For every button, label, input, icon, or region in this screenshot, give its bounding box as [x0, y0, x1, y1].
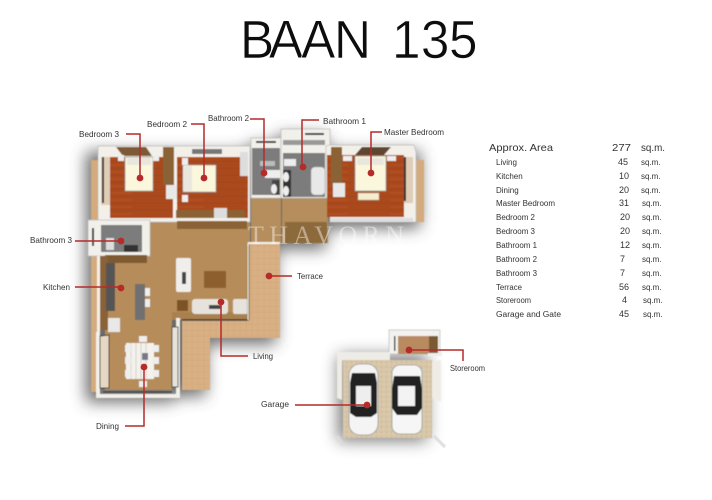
leader: master bedroom: [371, 132, 382, 173]
table rows: 4: [622, 295, 627, 305]
dining table: [125, 336, 159, 387]
closet: [331, 147, 342, 185]
bedroom 3 room: [101, 147, 173, 218]
room labels: Kitchen: [43, 282, 70, 292]
leader dots: [118, 164, 412, 408]
table rows: sq.m.: [642, 227, 662, 236]
table rows: sq.m.: [642, 283, 662, 292]
leader: kitchen: [75, 286, 121, 288]
storeroom: [389, 330, 440, 354]
floor plan: main house: [86, 129, 424, 402]
room labels: Bedroom 2: [147, 119, 187, 129]
kitchen: [98, 255, 150, 332]
area table: [489, 142, 665, 319]
table rows: 10: [619, 171, 629, 181]
drop shadow: [86, 135, 420, 402]
bathroom 1 room: [281, 129, 330, 198]
table rows: sq.m.: [642, 269, 662, 278]
bathroom 3 room: [88, 220, 150, 256]
table rows: 7: [620, 268, 625, 278]
table rows: Living: [496, 158, 517, 167]
leader: living: [221, 302, 248, 356]
table heading: 277: [612, 142, 631, 154]
table rows: 20: [620, 212, 630, 222]
table rows: Dining: [496, 186, 519, 195]
table rows: [496, 157, 663, 319]
table rows: Bedroom 3: [496, 227, 536, 236]
room labels: Bathroom 1: [323, 116, 366, 126]
leader lines: [75, 119, 463, 426]
window: [192, 149, 222, 154]
table rows: 45: [618, 157, 628, 167]
room labels: Bathroom 3: [30, 235, 72, 245]
table rows: 20: [619, 185, 629, 195]
title: BAAN: [240, 10, 371, 70]
room labels: [30, 113, 485, 431]
garage floor: [343, 360, 432, 438]
table rows: sq.m.: [641, 186, 661, 195]
table rows: Bedroom 2: [496, 213, 536, 222]
room labels: Bathroom 2: [208, 113, 249, 123]
room labels: Storeroom: [450, 363, 485, 373]
bed: [355, 156, 386, 191]
table rows: 20: [620, 226, 630, 236]
wardrobe top: [355, 147, 391, 155]
leader: bathroom 3: [75, 240, 121, 242]
room labels: Master Bedroom: [384, 127, 444, 137]
table rows: sq.m.: [643, 310, 663, 319]
table heading: sq.m.: [641, 142, 665, 154]
table rows: Kitchen: [496, 172, 523, 181]
closet between rooms: [163, 147, 174, 185]
room labels: Garage: [261, 399, 289, 409]
table rows: sq.m.: [642, 255, 662, 264]
room labels: Dining: [96, 421, 119, 431]
leader: terrace: [269, 275, 292, 277]
leader: storeroom: [409, 350, 463, 361]
table rows: 56: [619, 282, 629, 292]
leader: bedroom 3: [126, 134, 140, 178]
bed: [183, 165, 216, 192]
watermark: THAVORN: [248, 221, 404, 250]
bathroom 2 room: [251, 138, 281, 198]
table heading: Approx. Area: [489, 142, 553, 154]
table rows: Bathroom 2: [496, 255, 538, 264]
table rows: Storeroom: [496, 296, 531, 305]
table rows: 45: [619, 309, 629, 319]
table rows: sq.m.: [643, 296, 663, 305]
window: [101, 157, 110, 205]
master bedroom room: [326, 145, 416, 222]
title: [240, 10, 478, 70]
leader: garage: [295, 404, 367, 406]
table rows: sq.m.: [641, 172, 661, 181]
desk: [176, 210, 245, 218]
title: 135: [392, 10, 478, 70]
table rows: Terrace: [496, 283, 523, 292]
leader: bedroom 2: [191, 124, 204, 178]
living furniture: [176, 258, 248, 314]
leader: dining: [125, 367, 144, 426]
wardrobe top: [116, 147, 152, 156]
table rows: 31: [619, 198, 629, 208]
bedroom 2 room: [176, 149, 248, 218]
outer walls: bedroom wing: [98, 146, 250, 222]
right deck: [414, 160, 424, 222]
table heading: [489, 142, 665, 154]
table rows: sq.m.: [642, 213, 662, 222]
window: [404, 157, 413, 203]
table rows: sq.m.: [642, 199, 662, 208]
table rows: 7: [620, 254, 625, 264]
left deck: [91, 160, 99, 392]
dining walls and windows: [98, 320, 180, 396]
leader: bathroom 2: [250, 119, 264, 173]
table rows: Bathroom 1: [496, 241, 538, 250]
leader: bathroom 1: [302, 120, 319, 167]
terrace: [182, 243, 280, 390]
right car: [392, 365, 422, 434]
table rows: Bathroom 3: [496, 269, 538, 278]
table rows: Master Bedroom: [496, 199, 555, 208]
room labels: Living: [253, 351, 273, 361]
table rows: sq.m.: [642, 241, 662, 250]
room labels: Terrace: [297, 271, 323, 281]
room labels: Bedroom 3: [79, 129, 119, 139]
table rows: sq.m.: [641, 158, 661, 167]
table rows: Garage and Gate: [496, 310, 562, 319]
living floor: [105, 220, 250, 390]
table rows: 12: [620, 240, 630, 250]
left car: [349, 364, 378, 435]
floor plan: garage: [337, 330, 445, 447]
hall floors: [251, 197, 281, 243]
bed: [125, 157, 153, 191]
